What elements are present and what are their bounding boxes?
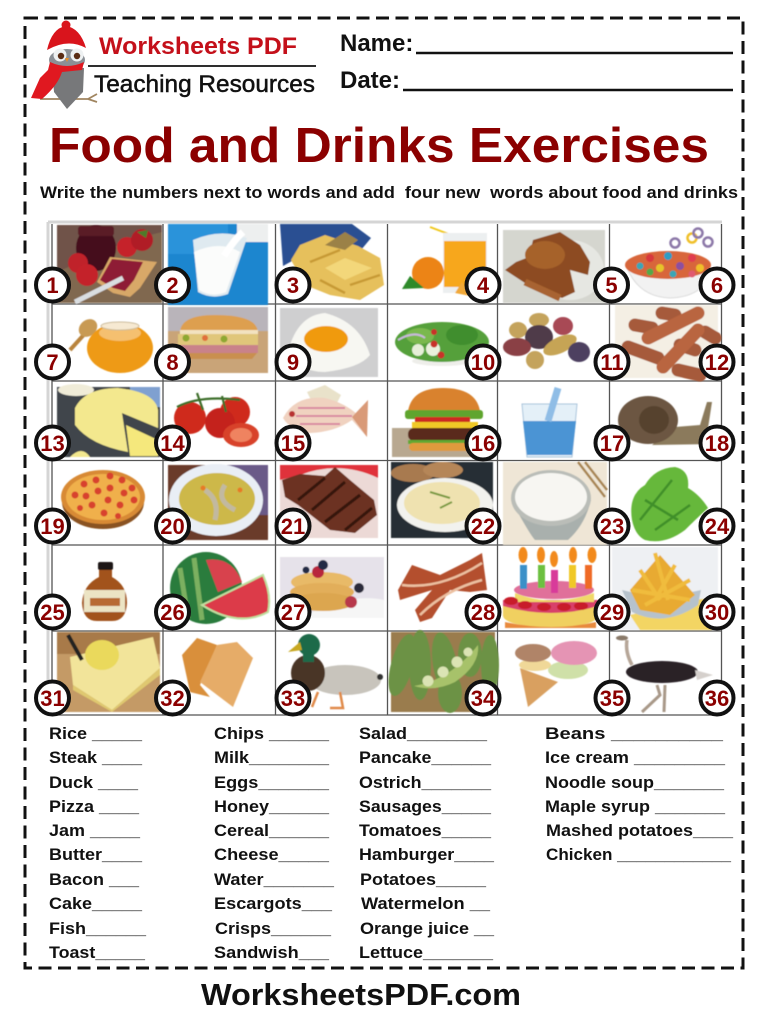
logo text: Worksheets PDF: Worksheets PDF bbox=[99, 33, 297, 60]
picture 26: watermelon bbox=[170, 552, 269, 624]
picture 36: ostrich bbox=[616, 636, 713, 712]
word list column 3: Tomatoes_____ bbox=[359, 821, 492, 840]
word list column 3: Lettuce_______ bbox=[359, 943, 494, 962]
picture 25: maple syrup bbox=[82, 562, 127, 621]
word list column 3: Sausages_____ bbox=[359, 797, 492, 816]
picture 6: cereal bbox=[625, 228, 712, 298]
word list column 3: Watermelon __ bbox=[361, 894, 491, 913]
word list column 2 bbox=[214, 724, 335, 962]
word list column 1: Toast_____ bbox=[49, 943, 146, 962]
number badges: 33 bbox=[281, 686, 305, 711]
number badges bbox=[36, 268, 734, 714]
word list column 4: Maple syrup _______ bbox=[545, 797, 726, 816]
picture 16: hamburger bbox=[392, 388, 484, 457]
word list column 4: Noodle soup_______ bbox=[545, 773, 725, 792]
picture 5: roast chicken bbox=[503, 230, 605, 303]
picture 27: pancakes bbox=[280, 557, 384, 618]
number badges: 32 bbox=[160, 686, 185, 711]
word list column 1: Steak ____ bbox=[49, 748, 143, 767]
number badges: 19 bbox=[40, 514, 65, 539]
number badges: 35 bbox=[600, 686, 624, 711]
word list column 2: Cheese_____ bbox=[214, 845, 330, 864]
instructions: Write the numbers next to words and add four new words about food and drinks bbox=[40, 184, 738, 202]
logo: owl with red hat and scarf bbox=[31, 20, 97, 109]
word list column 4: Chicken ____________ bbox=[546, 845, 732, 864]
number badges: 30 bbox=[705, 600, 729, 625]
number badges: 22 bbox=[471, 514, 495, 539]
number badges: 27 bbox=[281, 600, 305, 625]
word list column 1: Jam _____ bbox=[49, 821, 141, 840]
picture 17: glass of water bbox=[522, 388, 577, 457]
picture 18: snail bbox=[618, 396, 716, 445]
word list column 3: Potatoes_____ bbox=[360, 870, 487, 889]
word list column 2: Cereal______ bbox=[214, 821, 330, 840]
word list column 2: Crisps______ bbox=[215, 919, 332, 938]
number badges: 16 bbox=[471, 431, 495, 456]
picture 4: orange juice bbox=[402, 227, 487, 296]
number badges: 15 bbox=[281, 431, 305, 456]
word list column 1 bbox=[49, 724, 147, 962]
picture 32: toast bbox=[182, 638, 253, 707]
word list column 2: Milk________ bbox=[214, 748, 330, 767]
picture 9: fried egg bbox=[280, 308, 378, 377]
number badges: 34 bbox=[471, 686, 496, 711]
picture 35: ice cream bbox=[515, 641, 597, 707]
picture 29: birthday cake bbox=[503, 547, 598, 628]
date field: Date: bbox=[340, 67, 400, 94]
picture 1: jam and strawberries bbox=[57, 225, 162, 303]
number badges: 14 bbox=[160, 431, 185, 456]
picture 19: pizza bbox=[61, 470, 145, 529]
number badges: 3 bbox=[287, 273, 299, 298]
picture 21: steak bbox=[280, 465, 378, 538]
word list column 2: Eggs_______ bbox=[214, 773, 330, 792]
picture 11: potatoes bbox=[503, 313, 590, 369]
word list column 4: Beans __________ bbox=[545, 724, 724, 743]
number badges: 21 bbox=[281, 514, 305, 539]
title: Food and Drinks Exercises bbox=[49, 119, 709, 173]
word list column 1: Pizza ____ bbox=[49, 797, 140, 816]
picture 13: cheese bbox=[57, 384, 160, 457]
picture 15: fish bbox=[283, 385, 368, 437]
word list column 3 bbox=[359, 724, 495, 962]
number badges: 31 bbox=[40, 686, 65, 711]
word list column 3: Salad________ bbox=[359, 724, 488, 743]
picture 3: chips bbox=[280, 224, 384, 300]
number badges: 13 bbox=[40, 431, 65, 456]
word list column 3: Ostrich_______ bbox=[359, 773, 492, 792]
number badges: 17 bbox=[600, 431, 624, 456]
picture 8: sandwich bbox=[168, 307, 268, 373]
number badges: 7 bbox=[46, 350, 59, 375]
word list column 4: Mashed potatoes____ bbox=[546, 821, 734, 840]
number badges: 18 bbox=[705, 431, 729, 456]
picture 20: noodle soup bbox=[168, 464, 268, 540]
word list column 1: Duck ____ bbox=[49, 773, 139, 792]
picture 10: salad bbox=[395, 322, 489, 366]
word list column 1: Bacon ___ bbox=[49, 870, 140, 889]
number badges: 9 bbox=[287, 350, 299, 375]
number badges: 20 bbox=[160, 514, 185, 539]
word list column 1: Fish______ bbox=[49, 919, 147, 938]
name field: Name: bbox=[340, 30, 413, 57]
number badges: 2 bbox=[166, 273, 179, 298]
word list column 1: Butter____ bbox=[49, 845, 143, 864]
picture 33: duck bbox=[288, 634, 383, 708]
word list column 1: Cake_____ bbox=[49, 894, 143, 913]
word list column 4: Ice cream _________ bbox=[545, 748, 726, 767]
word list column 2: Chips ______ bbox=[214, 724, 330, 743]
picture grid bbox=[48, 222, 722, 716]
word list column 2: Sandwish___ bbox=[214, 943, 330, 962]
number badges: 5 bbox=[605, 273, 618, 298]
picture 12: sausages bbox=[615, 305, 718, 378]
word list column 3: Orange juice __ bbox=[360, 919, 495, 938]
picture 28: bacon bbox=[398, 553, 487, 622]
picture 30: french fries bbox=[612, 547, 718, 630]
number badges: 36 bbox=[705, 686, 729, 711]
picture 24: lettuce bbox=[631, 467, 708, 541]
number badges: 4 bbox=[477, 273, 490, 298]
picture 2: milk bbox=[168, 224, 268, 305]
number badges: 1 bbox=[46, 273, 59, 298]
word list column 4 bbox=[545, 724, 734, 864]
word list column 3: Hamburger____ bbox=[359, 845, 495, 864]
number badges: 6 bbox=[711, 273, 723, 298]
number badges: 8 bbox=[166, 350, 179, 375]
logo text: Teaching Resources: Teaching Resources bbox=[94, 71, 315, 98]
picture 14: tomatoes bbox=[174, 393, 259, 447]
picture 31: butter bbox=[57, 632, 160, 712]
number badges: 23 bbox=[600, 514, 624, 539]
number badges: 28 bbox=[471, 600, 495, 625]
number badges: 25 bbox=[40, 600, 65, 625]
picture 22: mashed potatoes bbox=[391, 462, 493, 538]
number badges: 12 bbox=[705, 350, 729, 375]
word list column 1: Rice _____ bbox=[49, 724, 143, 743]
number badges: 24 bbox=[705, 514, 730, 539]
picture 7: honey bbox=[70, 315, 153, 373]
word list column 2: Water_______ bbox=[214, 870, 335, 889]
picture 34: beans bbox=[383, 630, 499, 713]
number badges: 10 bbox=[471, 350, 495, 375]
picture 23: rice bowl bbox=[503, 462, 607, 545]
number badges: 29 bbox=[600, 600, 624, 625]
number badges: 11 bbox=[600, 350, 624, 375]
word list column 2: Honey______ bbox=[214, 797, 330, 816]
number badges: 26 bbox=[160, 600, 185, 625]
word list column 2: Escargots___ bbox=[214, 894, 333, 913]
footer website: WorksheetsPDF.com bbox=[201, 977, 521, 1012]
word list column 3: Pancake______ bbox=[359, 748, 492, 767]
